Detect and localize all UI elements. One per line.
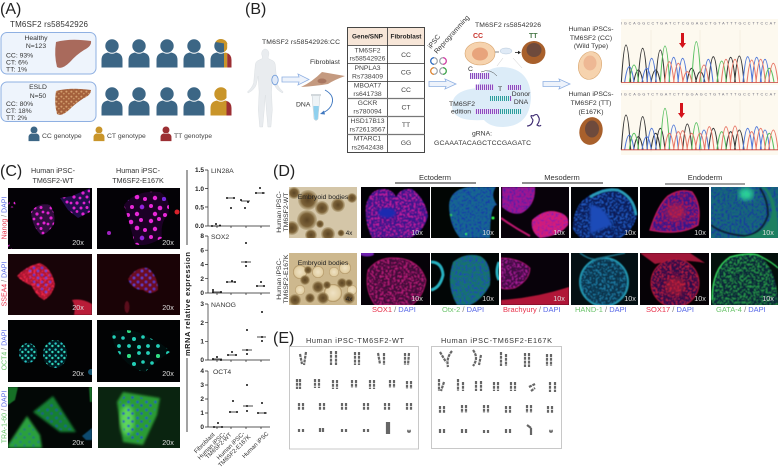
chart category labels: Fibroblast — [194, 432, 217, 455]
ESLD cohort card: CC: 80% — [6, 101, 33, 108]
panel letter A: (A) — [0, 1, 21, 18]
chart category labels: Human iPSC- — [197, 431, 227, 461]
column title E167K — [112, 166, 164, 185]
micrograph Nanog WT: 20x — [72, 238, 84, 247]
chart: NANOG: 2 — [200, 320, 204, 327]
gRNA sequence: GCAAATACAGCTCCGAGATC — [434, 140, 531, 147]
micrograph OCT4 E167K — [97, 320, 180, 382]
row label Nanog: Nanog / DAPI — [2, 197, 8, 239]
E167K line label: (E167K) — [579, 109, 603, 116]
SNP table: GG — [401, 140, 411, 147]
editing heading: TM6SF2 rs58542926 — [475, 22, 541, 29]
chart: LIN28A: 0.0 — [195, 223, 204, 230]
icon: E167K cell — [576, 115, 606, 147]
micrograph GATA-4 E167K: 10x — [762, 294, 774, 303]
healthy cohort card: TT: 1% — [6, 66, 27, 74]
stain labels: SOX17 / DAPI — [646, 305, 694, 314]
nucleus editing cloud: Donor — [512, 91, 531, 98]
healthy cohort card: CC: 93% — [6, 52, 33, 60]
chart category labels — [194, 431, 271, 469]
SNP table: GCKR — [358, 100, 377, 107]
chart category labels: Human iPSC- — [216, 431, 246, 461]
micrograph SOX17 WT — [640, 187, 709, 238]
icon: human body — [247, 49, 283, 127]
chart: NANOG: 0 — [200, 357, 204, 364]
row label TRA-1-60: TRA-1-60 / DAPI — [2, 391, 8, 443]
chart: NANOG: 3 — [200, 301, 204, 308]
row label WT: TM6SF2-WT — [283, 193, 290, 231]
chart: NANOG — [200, 301, 270, 364]
stain labels: SOX1 / DAPI — [372, 305, 416, 314]
chart: OCT4: 4 — [200, 368, 204, 375]
panel C: pluripotency markers — [0, 163, 271, 469]
micrograph TRA-1-60 E167K — [98, 387, 180, 448]
SNP table: MTARC1 — [354, 136, 381, 142]
iPSC reprogramming label: Reprogramming — [433, 14, 471, 55]
chart category labels: Human iPSC — [242, 431, 271, 460]
icon: TT cell — [518, 38, 549, 67]
germ layer headers: Endoderm — [688, 173, 722, 182]
icon: wild type cell — [575, 49, 605, 82]
gRNA sequence: gRNA: — [472, 130, 492, 138]
micrograph GATA-4 WT — [711, 187, 778, 238]
nucleus editing cloud — [449, 66, 531, 127]
ESLD cohort card: N=50 — [30, 93, 46, 100]
karyotype WT — [290, 336, 418, 449]
stain labels: GATA-4 / DAPI — [716, 305, 766, 314]
micrograph Nanog WT — [8, 188, 92, 249]
micrograph SSEA4 E167K: 20x — [162, 303, 174, 312]
chart: SOX2: 0 — [200, 290, 204, 297]
wild type line label: (Wild Type) — [574, 43, 608, 50]
row label E167K: TM6SF2-E167K — [283, 254, 290, 303]
chart: LIN28A: LIN28A — [211, 168, 234, 175]
chart: OCT4: 3 — [200, 382, 204, 389]
micrograph GATA-4 WT: 10x — [762, 228, 774, 237]
embryoid bodies WT: 4x — [346, 230, 353, 237]
wild type line label: Human iPSCs- — [569, 26, 613, 33]
column title WT: Human iPSC- — [31, 166, 76, 175]
SNP table: TT — [402, 122, 410, 129]
micrograph Nanog E167K — [97, 188, 180, 249]
micrograph GATA-4 E167K — [711, 253, 778, 305]
panel letter E: (E) — [273, 330, 294, 347]
nucleus editing cloud: edition — [451, 108, 471, 116]
embryoid bodies E167K: Embryoid bodies — [298, 260, 349, 267]
wild type line label: TM6SF2 (CC) — [570, 35, 612, 42]
E167K line label: Human iPSCs- — [569, 91, 613, 98]
chart: LIN28A: 1.0 — [195, 186, 204, 193]
genotype legend: CT genotype — [107, 133, 146, 140]
embryoid bodies WT — [289, 187, 357, 238]
chart: NANOG: 1 — [200, 338, 204, 346]
fibroblast label: Fibroblast — [310, 59, 340, 66]
SNP table: TM6SF2 — [354, 48, 381, 54]
nucleus editing cloud: T — [498, 86, 502, 93]
micrograph OCT4 E167K: 20x — [162, 369, 174, 378]
SNP table: Rs738409 — [352, 74, 383, 80]
chart: OCT4: 0 — [200, 424, 204, 431]
chart: SOX2: 6 — [200, 248, 204, 254]
micrograph SOX1 WT: 10x — [411, 228, 423, 237]
stain labels: HAND-1 / DAPI — [575, 305, 627, 314]
chart: LIN28A — [195, 167, 270, 230]
arrow to fibroblast — [282, 74, 309, 85]
stain labels — [372, 305, 766, 314]
micrograph HAND-1 E167K: 10x — [624, 294, 636, 303]
red arrow — [679, 33, 686, 48]
karyotype E167K: Human iPSC-TM6SF2-E167K — [441, 336, 552, 345]
TT label: TT — [529, 33, 538, 40]
gRNA sequence — [434, 130, 531, 147]
nucleus editing cloud: C — [468, 66, 473, 73]
arrow to iPSC lines — [543, 79, 570, 89]
chart: OCT4 — [200, 368, 270, 431]
curved arrow fibroblast to DNA — [322, 90, 333, 113]
row label E167K: Human iPSC- — [276, 258, 283, 300]
SNP table: Gene/SNP — [352, 34, 384, 40]
micrograph TRA-1-60 WT: 20x — [72, 438, 84, 447]
icon: CC cell — [465, 42, 495, 65]
micrograph TRA-1-60 WT — [8, 387, 92, 448]
SNP table: rs2642438 — [351, 144, 384, 152]
micrograph SOX17 E167K: 10x — [694, 294, 706, 303]
chromatogram: E167K — [621, 90, 778, 155]
icon: plasmids — [431, 58, 446, 74]
chart: SOX2: SOX2 — [211, 234, 229, 241]
chart: NANOG: NANOG — [211, 302, 236, 309]
micrograph SOX1 E167K — [361, 253, 430, 305]
SNP table: Fibroblast — [391, 34, 422, 40]
SNP table: rs641738 — [353, 91, 382, 98]
genotype legend: CC genotype — [42, 133, 82, 140]
mRNA axis title: mRNA relative expression — [183, 252, 192, 356]
stain labels: Otx-2 / DAPI — [442, 305, 484, 314]
red arrow — [678, 103, 685, 118]
chart category labels: TM6SF2-E167K — [218, 434, 252, 469]
wild type line label — [569, 26, 613, 50]
SNP table: HSD17B13 — [350, 118, 385, 125]
micrograph SOX17 WT: 10x — [694, 228, 706, 237]
germ layer headers: Ectoderm — [419, 173, 451, 182]
CC label: CC — [473, 33, 483, 40]
chromatogram: wild type — [621, 19, 778, 85]
micrograph Brachyury WT: 10x — [553, 228, 565, 237]
panel D: three germ layer differentiation — [273, 163, 778, 314]
icon: guide RNA squiggle — [527, 114, 541, 126]
healthy cohort card — [1, 32, 96, 74]
E167K line label — [569, 91, 613, 116]
SNP table: MBOAT7 — [354, 82, 381, 90]
micrograph Brachyury E167K: 10x — [553, 294, 565, 303]
micrograph HAND-1 WT — [571, 187, 638, 238]
micrograph Nanog E167K: 20x — [162, 238, 174, 247]
column title WT: TM6SF2-WT — [32, 176, 74, 185]
transition to edited cell — [495, 48, 522, 68]
E167K line label: TM6SF2 (TT) — [571, 100, 611, 107]
SNP table: CC — [401, 52, 411, 59]
row label SSEA4: SSEA4 / DAPI — [2, 262, 8, 306]
micrograph SOX17 E167K — [640, 253, 709, 305]
chart: SOX2: 8 — [200, 233, 204, 240]
chart: LIN28A: 0.5 — [195, 204, 204, 212]
micrograph HAND-1 WT: 10x — [624, 228, 636, 237]
ESLD cohort card: CT: 18% — [6, 108, 32, 115]
micrograph Otx-2 WT: 10x — [482, 228, 494, 237]
DNA label: DNA — [296, 102, 311, 108]
micrograph Otx-2 WT — [431, 187, 499, 238]
SNP table — [348, 28, 424, 152]
SNP table: rs58542926 — [350, 56, 386, 62]
chart: SOX2: 2 — [200, 276, 204, 283]
micrograph Brachyury E167K — [501, 253, 569, 305]
nucleus editing cloud: DNA — [514, 99, 529, 106]
icon: fibroblast cell — [301, 72, 345, 87]
ESLD cohort card — [1, 82, 96, 122]
ESLD cohort card: ESLD — [29, 84, 47, 91]
embryoid bodies E167K — [289, 253, 357, 305]
micrograph OCT4 WT: 20x — [72, 369, 84, 378]
healthy person icons — [102, 39, 232, 68]
SNP table: CT — [401, 104, 411, 112]
micrograph SOX1 E167K: 10x — [411, 294, 423, 303]
healthy cohort card: Healthy — [24, 35, 48, 42]
karyotype WT: Human iPSC-TM6SF2-WT — [306, 336, 405, 345]
chart category labels: TM6SF2-WT — [205, 432, 234, 461]
micrograph Otx-2 E167K: 10x — [482, 294, 494, 303]
panel A: genotype distribution — [0, 1, 232, 141]
panel letter C: (C) — [0, 163, 22, 180]
stain labels: Brachyury / DAPI — [503, 305, 561, 314]
chart: SOX2: 4 — [200, 262, 204, 268]
panel letter D: (D) — [273, 163, 295, 180]
chart: OCT4: 2 — [200, 396, 204, 403]
micrograph HAND-1 E167K — [571, 253, 638, 305]
donor label: TM6SF2 rs58542926:CC — [262, 39, 340, 46]
micrograph SSEA4 E167K — [97, 254, 180, 315]
healthy cohort card: N=123 — [26, 43, 46, 50]
chart: SOX2 — [200, 233, 270, 297]
micrograph SSEA4 WT — [8, 254, 92, 315]
icon: DNA tube — [311, 94, 321, 120]
column title WT — [31, 166, 76, 185]
genotype legend: TT genotype — [174, 133, 212, 140]
arrow to gene editing — [429, 79, 456, 89]
chromatogram: E167K: IGCAGGTCTGATCTTGGAGCTGTATTTGCCTTCCAT — [621, 92, 777, 96]
ESLD person icons — [102, 87, 232, 116]
panel letter B: (B) — [245, 1, 266, 18]
column title E167K: TM6SF2-E167K — [112, 176, 164, 185]
germ layer headers: Mesoderm — [544, 173, 580, 182]
germ layer headers — [395, 173, 745, 184]
micrograph Brachyury WT — [501, 187, 569, 238]
SNP table: CC — [401, 87, 411, 94]
nucleus editing cloud: TM6SF2 — [449, 101, 475, 108]
healthy cohort card: CT: 6% — [6, 60, 28, 66]
embryoid bodies E167K: 4x — [346, 296, 353, 303]
karyotype E167K — [432, 336, 562, 448]
micrograph SSEA4 WT: 20x — [72, 303, 84, 312]
SNP table: CG — [401, 70, 411, 76]
SNP table: rs72613567 — [350, 126, 386, 134]
row label WT: Human iPSC- — [276, 191, 283, 233]
micrograph TRA-1-60 E167K: 20x — [162, 438, 174, 447]
chart: OCT4: OCT4 — [213, 369, 231, 376]
genotype legend — [29, 127, 212, 141]
panel A heading: TM6SF2 rs58542926 — [10, 20, 89, 29]
embryoid bodies WT: Embryoid bodies — [298, 194, 349, 201]
micrograph OCT4 WT — [8, 320, 92, 382]
ESLD cohort card: TT: 2% — [6, 115, 27, 122]
column title E167K: Human iPSC- — [116, 166, 161, 175]
row label WT — [276, 191, 290, 233]
panel E: karyotypes — [273, 330, 562, 449]
micrograph Otx-2 E167K — [431, 253, 499, 305]
row label OCT4: OCT4 / DAPI — [2, 330, 8, 370]
chromatogram: wild type: IGCAGGCCTGATCTCGGAGCTGTATTTGCCTTCCAT — [621, 22, 777, 26]
chart: OCT4: 1 — [200, 410, 204, 417]
chart: LIN28A: 1.5 — [195, 167, 204, 174]
SNP table: rs780094 — [353, 108, 382, 116]
SNP table: PNPLA3 — [354, 65, 381, 72]
iPSC reprogramming label: iPSC — [427, 34, 442, 50]
micrograph SOX1 WT — [361, 187, 430, 238]
row label E167K — [276, 254, 290, 303]
panel B: iPSC generation workflow — [245, 1, 778, 155]
